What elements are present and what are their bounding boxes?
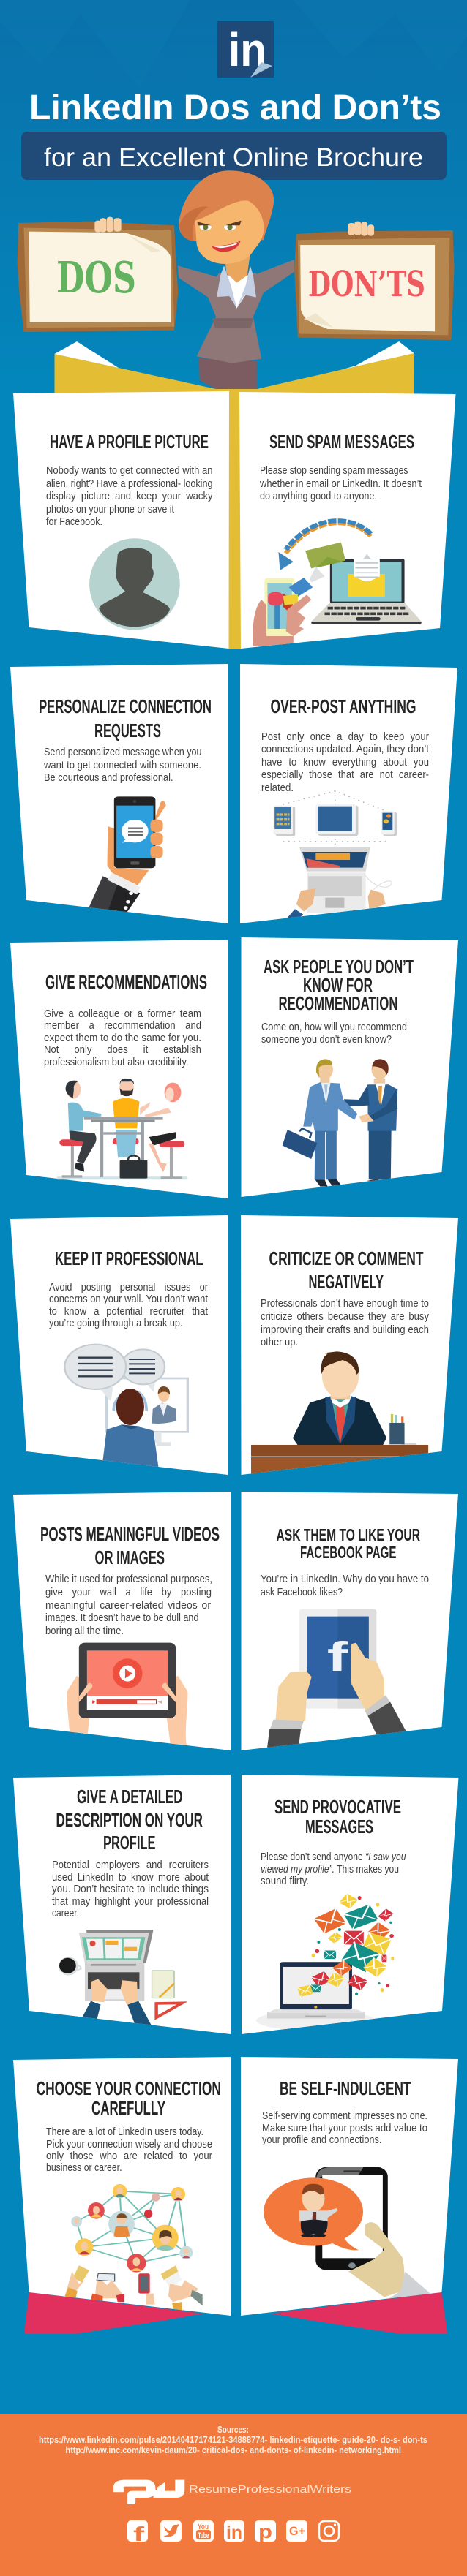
icon: LinkedIn logo: in [228, 23, 266, 76]
hands on signs [94, 217, 374, 236]
icon: google plus: G+ [289, 2524, 305, 2538]
panel: criticize or comment negatively [241, 1215, 458, 1476]
panel: be self-indulgent [241, 2057, 458, 2316]
body text [46, 465, 213, 528]
sources [39, 2425, 427, 2455]
icon: facebook [127, 2520, 148, 2545]
shirt and collar [217, 265, 256, 309]
body text: professionalism but also credibility. [44, 1057, 189, 1068]
heading: PERSONALIZE CONNECTION [39, 695, 212, 717]
icon: pinterest [255, 2520, 276, 2542]
body text: Please don’t send anyone “I saw you [261, 1851, 406, 1863]
subtitle banner: for an Excellent Online Brochure [44, 143, 423, 172]
body text: improving their crafts and building each [261, 1324, 429, 1336]
body text [46, 2126, 212, 2174]
body text: Professionals don’t have enough time to [261, 1298, 429, 1310]
body text [49, 1282, 208, 1329]
book back cover [54, 341, 414, 649]
title: LinkedIn Dos and Don’ts [29, 88, 441, 127]
body text: for Facebook. [46, 516, 102, 528]
body text: connections updated. Again, they don’t [261, 744, 429, 755]
body text: Be courteous and professional. [44, 772, 173, 784]
icon: facebook: f [133, 2523, 145, 2545]
heading [40, 1523, 220, 1568]
body text: you’re going through a break up. [49, 1318, 183, 1329]
arms and jacket [178, 260, 294, 363]
sources: Sources: [217, 2425, 249, 2435]
panel: give a detailed description [13, 1775, 231, 2038]
heading: CAREFULLY [91, 2097, 165, 2119]
heading: HAVE A PROFILE PICTURE [50, 431, 209, 453]
body text: ask Facebook likes? [261, 1587, 343, 1598]
illustration: envelopes bursting from laptop [256, 1893, 394, 2031]
body text [261, 731, 429, 794]
panel: posts meaningful videos [13, 1492, 231, 1750]
body text: Post only once a day to keep your [261, 731, 429, 743]
heading [264, 956, 414, 1014]
illustration: man at a desk [251, 1351, 428, 1476]
body text: especially those that are not career- [261, 769, 429, 781]
body text: your profile and connections. [262, 2134, 382, 2146]
social icons [127, 2520, 339, 2545]
illustration: phone with speech bubble [264, 2167, 430, 2300]
heading: KNOW FOR [303, 974, 373, 996]
body text: related. [261, 782, 294, 794]
body text: have to know everything about you [261, 757, 429, 768]
body text: do anything good to anyone. [260, 491, 377, 502]
body text: Send personalized message when you [44, 747, 202, 758]
heading: RECOMMENDATION [278, 992, 398, 1014]
heading: SEND PROVOCATIVE [274, 1796, 401, 1818]
body text: Not only does it establish [44, 1044, 201, 1056]
illustration: people network and hands with phones [64, 2184, 203, 2311]
body text: criticize others because they are busy [261, 1311, 430, 1323]
face [195, 200, 264, 264]
body text: used LinkedIn to know more about [52, 1872, 209, 1884]
illustration: woman holding signs [18, 170, 455, 389]
heading: GIVE RECOMMENDATIONS [45, 971, 207, 993]
body text: concerns on your wall. You don’t want [49, 1293, 208, 1305]
heading: POSTS MEANINGFUL VIDEOS [40, 1523, 220, 1545]
mouth [212, 241, 241, 252]
body text: While it used for professional purposes, [45, 1574, 212, 1585]
illustration: three people at a table [56, 1079, 187, 1179]
illustration: laptop on desk from above [59, 1930, 182, 2038]
icon: pinterest: p [258, 2520, 272, 2542]
body text: Give a colleague or a former team [44, 1008, 201, 1020]
body text [261, 1298, 430, 1348]
body text: member a recommendation and [44, 1020, 201, 1032]
body text [261, 1851, 406, 1887]
illustration: video call with speech bubbles [64, 1345, 187, 1468]
heading [274, 1796, 401, 1837]
heading: OR IMAGES [95, 1546, 165, 1568]
neck [225, 254, 250, 283]
illustration: two businessmen shaking hands [283, 1059, 397, 1187]
body text: whether in email or LinkedIn. It doesn’t [259, 478, 422, 490]
body text: viewed my profile”. This makes you [261, 1864, 399, 1876]
body text: display picture and keep your wacky [46, 491, 213, 502]
heading [269, 1247, 424, 1293]
panel: send spam messages [239, 392, 455, 649]
heading: PROFILE [103, 1832, 155, 1854]
heading: CHOOSE YOUR CONNECTION [37, 2077, 221, 2099]
hair back [179, 170, 274, 241]
heading: REQUESTS [94, 719, 161, 741]
panel: over-post anything [240, 664, 457, 923]
sign text: DOS: DOS [56, 252, 136, 303]
body text: Potential employers and recruiters [52, 1859, 209, 1871]
eyes [197, 221, 242, 230]
logo: ResumeProfessionalWriters [113, 2480, 351, 2504]
illustration: hand holding phone [89, 796, 166, 913]
body text: alien, right? Have a professional- looking [46, 478, 212, 490]
icon: linkedin: in [226, 2523, 242, 2543]
body text: only those who are related to your [46, 2150, 212, 2162]
subtitle banner [21, 132, 447, 180]
illustration: spam on phone and laptop [253, 521, 422, 646]
body text: You’re in LinkedIn. Why do you have to [261, 1574, 429, 1585]
body text: expect them to do the same for you. [44, 1032, 201, 1044]
body text [43, 747, 202, 784]
body text: want to get connected with someone. [43, 760, 201, 771]
illustration: hands tapping facebook on tablet: f [327, 1634, 349, 1680]
body text: photos on your phone or save it [46, 504, 174, 515]
sign: don'ts board [294, 230, 455, 340]
sign text: DON'TS: DON’TS [308, 264, 425, 305]
body text [45, 1574, 212, 1637]
heading: MESSAGES [305, 1816, 373, 1837]
sources: http://www.inc.com/kevin-daum/20- critical-dos- and-donts- of-linkedin- networking.html [66, 2445, 401, 2455]
body text: Self-serving comment impresses no one. [262, 2110, 427, 2122]
illustration: hands tapping facebook on tablet [266, 1609, 409, 1753]
panel: keep it professional [10, 1215, 228, 1475]
icon: youtube [193, 2520, 214, 2542]
body text: Nobody wants to get connected with an [46, 465, 212, 477]
body text: to know a potential recruiter that [49, 1306, 208, 1318]
panel: give recommendations [10, 940, 228, 1198]
panel: choose your connection carefully [13, 2057, 231, 2316]
pants [199, 358, 257, 389]
heading [39, 695, 212, 741]
heading: NEGATIVELY [309, 1271, 384, 1293]
body text: meaningful career-related videos or [45, 1600, 211, 1612]
icon: instagram [319, 2521, 339, 2541]
body text: career. [52, 1908, 79, 1919]
body text: Pick your connection wisely and choose [46, 2139, 212, 2150]
sources: https://www.linkedin.com/pulse/20140417174121-34888774- linkedin-etiquette- guide-20- do-s- don-ts [39, 2435, 427, 2445]
body text: Come on, how will you recommend [261, 1021, 407, 1033]
icon: profile silhouette [89, 538, 180, 630]
heading: GIVE A DETAILED [77, 1786, 183, 1808]
panel: personalize connection requests [10, 664, 228, 923]
icon: google plus [286, 2520, 307, 2542]
body text: Avoid posting personal issues or [49, 1282, 208, 1293]
body text: Make sure that your posts add value to [262, 2123, 427, 2134]
icon: twitter [160, 2520, 182, 2542]
heading [56, 1786, 203, 1854]
panel: send provocative messages [242, 1775, 458, 2034]
body text [52, 1859, 209, 1919]
heading: FACEBOOK PAGE [300, 1543, 397, 1562]
body text: images. It doesn’t have to be dull and [45, 1612, 199, 1624]
jacket belt [212, 318, 253, 328]
icon: youtube: You [198, 2523, 209, 2531]
illustration: devices and laptop [274, 791, 397, 919]
footer band [0, 2414, 467, 2576]
body text: other up. [261, 1337, 298, 1348]
icon: youtube: Tube [198, 2531, 209, 2540]
heading: DESCRIPTION ON YOUR [56, 1809, 203, 1831]
sign: dos board [18, 222, 178, 332]
panel: have a profile picture [13, 391, 229, 649]
body text [259, 465, 422, 502]
body text: that may highlight your professional [52, 1896, 209, 1908]
body text [262, 2110, 427, 2146]
body text [44, 1008, 201, 1068]
hair shadow [179, 206, 209, 241]
logo: ResumeProfessionalWriters: ResumeProfessionalWriters [189, 2483, 351, 2496]
body text: There are a lot of LinkedIn users today. [46, 2126, 203, 2138]
icon: LinkedIn logo [217, 21, 274, 78]
header gradient background [0, 0, 467, 380]
panel: ask them to like your facebook page [242, 1492, 458, 1753]
body text [261, 1574, 429, 1598]
panel: ask people you don't know [242, 937, 458, 1197]
heading: KEEP IT PROFESSIONAL [55, 1247, 203, 1269]
body text: Please stop sending spam messages [260, 465, 408, 477]
body text: sound flirty. [261, 1876, 309, 1887]
heading [277, 1525, 420, 1562]
body text [261, 1021, 407, 1046]
body text: business or career. [46, 2162, 122, 2174]
body text: someone you don’t even know? [261, 1034, 392, 1046]
body text: give your wall a life by posting [45, 1587, 212, 1598]
body text: you. Don’t hesitate to include things [52, 1884, 209, 1895]
book back cover: red [24, 2292, 447, 2334]
illustration: hands holding tablet with video [67, 1643, 187, 1750]
body text: boring all the time. [45, 1625, 124, 1637]
heading [37, 2077, 221, 2119]
